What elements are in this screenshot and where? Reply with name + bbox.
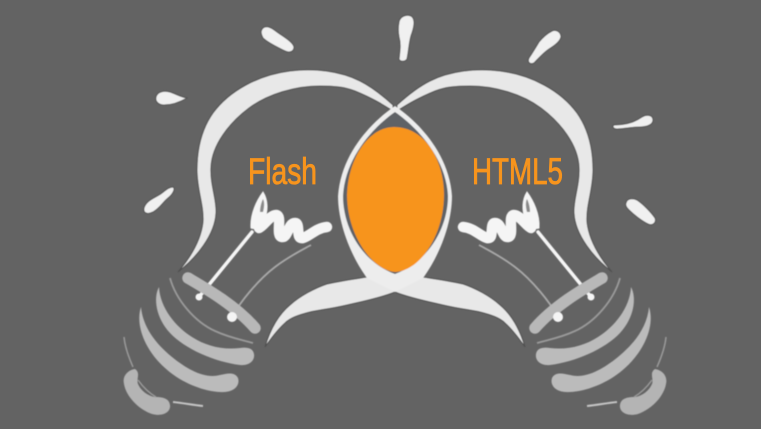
ray: top — [398, 15, 414, 61]
light rays — [144, 15, 655, 225]
thin base arc — [170, 278, 253, 343]
bulb outline — [397, 70, 612, 272]
orange core — [347, 127, 444, 272]
base strip three — [552, 307, 651, 392]
lens inner — [343, 112, 448, 274]
bulb: HTML5 (right) — [392, 70, 666, 415]
ray: top right — [528, 30, 561, 64]
lower bulb band — [265, 277, 398, 347]
thin base arc — [537, 278, 620, 343]
ray: lower left — [144, 187, 174, 213]
base strip one — [188, 278, 255, 328]
filament coil — [463, 215, 531, 238]
filament loop — [523, 192, 539, 228]
label: Flash: Flash — [248, 151, 317, 192]
base strip two — [536, 287, 634, 365]
label: HTML5: HTML5 — [472, 151, 563, 192]
base strip two — [156, 287, 254, 365]
lower bulb band — [392, 277, 525, 347]
bulb: Flash (left) — [124, 70, 398, 415]
ray: right — [613, 115, 653, 129]
filament coil — [259, 215, 327, 238]
ray: left — [156, 91, 187, 105]
cap thin lines — [587, 337, 666, 406]
filament loop — [251, 192, 267, 228]
ray: lower right — [626, 199, 655, 225]
wire contacts — [553, 294, 594, 322]
filament loop hole — [526, 199, 530, 212]
wire contacts — [196, 294, 237, 322]
base strip three — [139, 307, 238, 392]
base cap — [620, 369, 666, 415]
bulb outline — [178, 70, 393, 272]
filament wire — [199, 232, 252, 297]
centre overlap lens — [338, 106, 452, 292]
lens outer — [338, 106, 452, 292]
base cap — [124, 369, 170, 415]
illustration — [124, 15, 666, 415]
cap thin lines — [124, 337, 203, 406]
filament loop hole — [260, 199, 264, 212]
thin support wire — [232, 245, 311, 317]
ray: top left — [261, 27, 294, 52]
base strip one — [535, 278, 602, 328]
filament wire — [538, 232, 591, 297]
thin support wire — [479, 245, 558, 317]
